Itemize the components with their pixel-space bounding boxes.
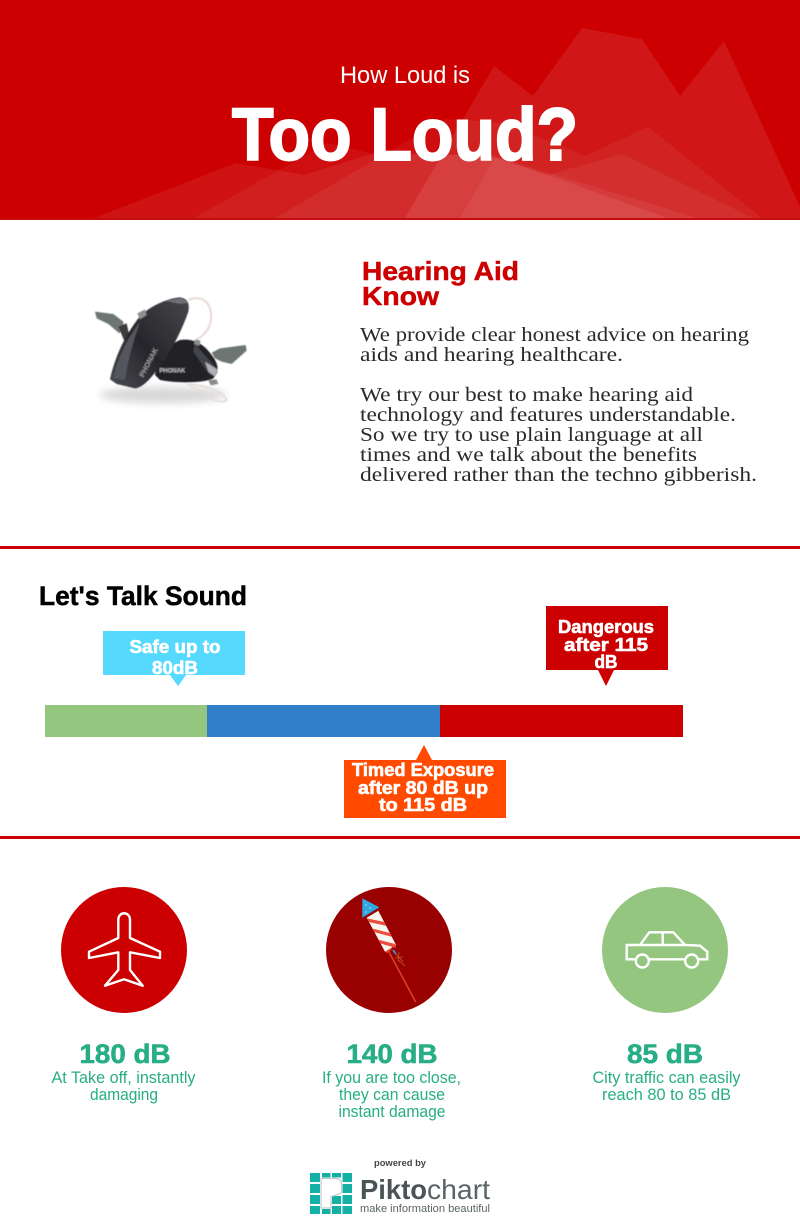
intro text: times and we talk about the benefits — [360, 444, 697, 466]
right ear tip — [212, 345, 247, 364]
left ear tip — [95, 312, 123, 333]
stat: 140 dB — [322, 1039, 461, 1121]
callout: timed exposure: to 115 dB — [379, 795, 467, 815]
intro text: So we try to use plain language at all — [360, 424, 704, 446]
callout: dangerous: after 115 — [564, 635, 648, 655]
section heading: Hearing Aid Know: Hearing Aid — [362, 256, 519, 286]
callout: dangerous: Dangerous — [558, 617, 654, 637]
intro text: We try our best to make hearing aid — [360, 384, 693, 406]
callout: safe — [103, 631, 245, 686]
stat: 140 dB: 140 dB — [346, 1039, 438, 1069]
icon: firework rocket — [326, 887, 452, 1013]
title: Too Loud? — [232, 93, 578, 176]
intro text: technology and features understandable. — [360, 404, 736, 426]
sound level bar — [45, 705, 683, 737]
right body — [155, 340, 218, 382]
subtitle: How Loud is — [340, 62, 470, 89]
callout: timed exposure — [344, 745, 506, 818]
icon: car — [602, 887, 728, 1013]
piktochart footer logo: chart — [427, 1174, 490, 1205]
callout: timed exposure: after 80 dB up — [358, 778, 488, 798]
stat: 85 dB — [592, 1039, 741, 1104]
stat: 140 dB: instant damage — [338, 1102, 446, 1121]
stat: 180 dB — [52, 1039, 196, 1104]
piktochart footer logo: make information beautiful — [360, 1203, 490, 1215]
hearing aid image: PHONAK — [137, 346, 160, 379]
section heading: Let's Talk Sound: Let's Talk Sound — [39, 581, 247, 611]
section heading: Hearing Aid Know: Know — [362, 281, 440, 311]
intro text: delivered rather than the techno gibberish. — [360, 464, 757, 486]
stat: 85 dB: City traffic can easily — [592, 1068, 741, 1087]
logo mark — [310, 1173, 352, 1214]
stat: 85 dB: reach 80 to 85 dB — [602, 1085, 731, 1104]
icon: airplane — [61, 887, 187, 1013]
section heading: Hearing Aid Know — [362, 256, 519, 311]
intro text: We provide clear honest advice on hearing — [360, 324, 749, 346]
piktochart footer logo — [310, 1158, 490, 1215]
intro text: aids and hearing healthcare. — [360, 344, 623, 366]
stat: 85 dB: 85 dB — [627, 1039, 703, 1069]
stat: 180 dB: At Take off, instantly — [52, 1068, 196, 1087]
stat: 180 dB: 180 dB — [80, 1039, 170, 1069]
left body — [110, 297, 189, 388]
callout: safe: Safe up to — [130, 637, 220, 657]
stat: 140 dB: they can cause — [339, 1085, 445, 1104]
mountain silhouettes — [94, 28, 800, 218]
callout: safe: 80dB — [152, 658, 198, 678]
stat: 140 dB: If you are too close, — [322, 1068, 461, 1087]
header banner — [0, 0, 800, 220]
callout: timed exposure: Timed Exposure — [352, 760, 494, 780]
callout: dangerous: dB — [594, 652, 618, 672]
piktochart footer logo: powered by — [374, 1158, 427, 1169]
hearing aid image: PHONAK — [159, 369, 186, 375]
intro text — [360, 324, 757, 486]
callout: dangerous — [546, 606, 668, 686]
piktochart footer logo: Pikto — [360, 1174, 427, 1205]
stat: 180 dB: damaging — [90, 1085, 158, 1104]
hearing aid image — [95, 297, 247, 403]
